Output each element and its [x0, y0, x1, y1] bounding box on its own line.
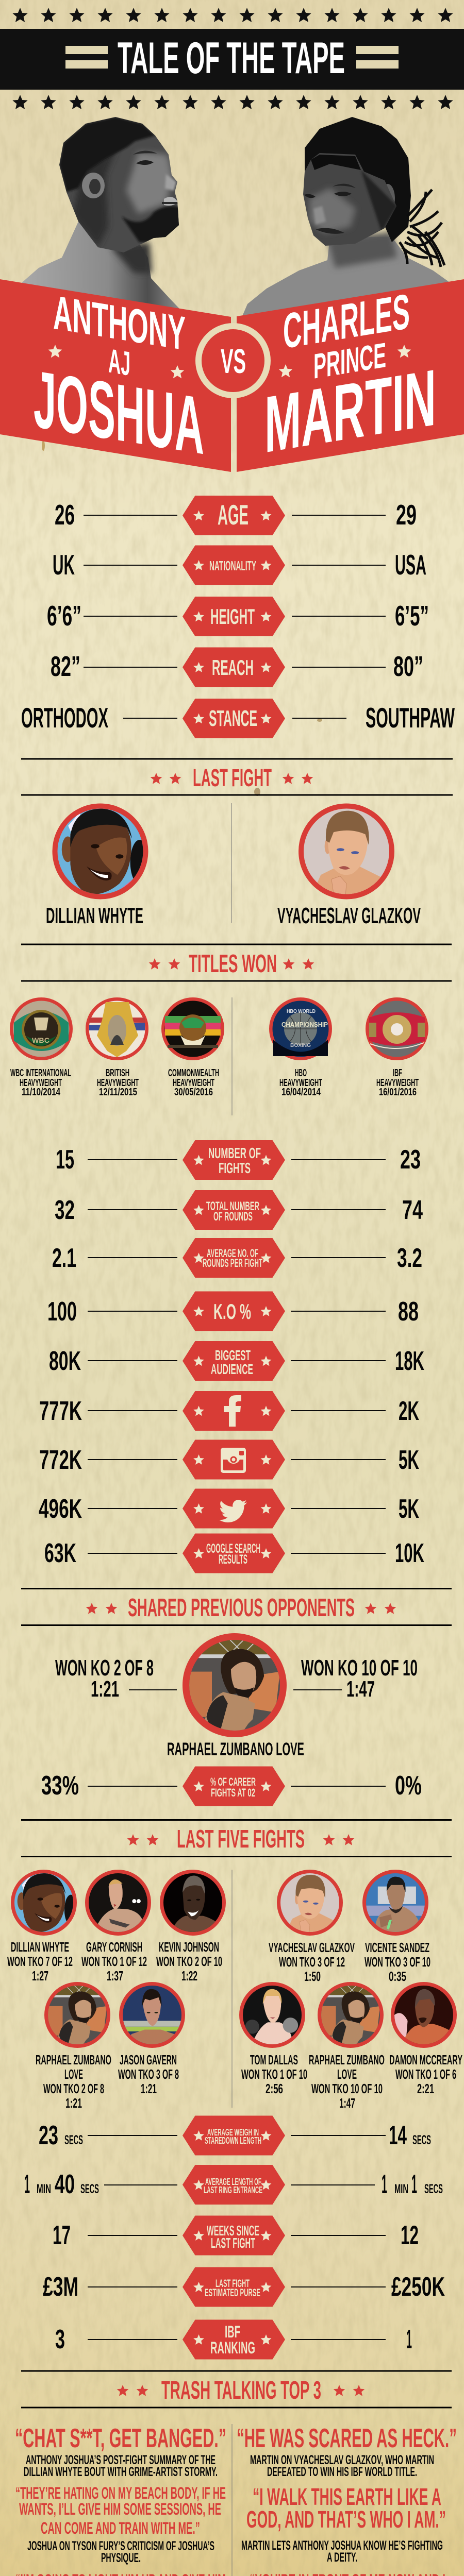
result: Joshua: WON KO 2 OF 8 — [55, 1655, 154, 1681]
row: stance — [21, 699, 455, 738]
fight: Vyacheslav Glazkov: WON TKO 3 OF 12 — [279, 1954, 345, 1970]
fight: Vyacheslav Glazkov: VYACHESLAV GLAZKOV — [269, 1940, 355, 1955]
row: facebook: 2K — [399, 1396, 419, 1426]
row: percent of career fights at O2: FIGHTS AT 02 — [211, 1786, 255, 1799]
row: percent of career fights at O2: 33% — [41, 1771, 79, 1801]
row: nationality: USA — [395, 549, 426, 581]
row: IBF ranking — [55, 2319, 412, 2360]
quote: Martin 2 — [241, 2483, 446, 2565]
labels: Joshua titles: 11/10/2014 — [22, 1087, 61, 1098]
labels: Martin titles: HEAVYWEIGHT — [279, 1077, 322, 1089]
quote: Joshua 2: JOSHUA ON TYSON FURY’S CRITICISM OF JOSHUA’S — [27, 2539, 214, 2553]
VS badge: VS — [221, 342, 246, 381]
fight: Damon McCreary — [389, 1982, 462, 2096]
row: nationality: NATIONALITY — [209, 558, 256, 573]
labels: Martin titles: 16/04/2014 — [281, 1087, 321, 1098]
name: Dillian Whyte: DILLIAN WHYTE — [46, 903, 143, 928]
row: stance: ORTHODOX — [21, 702, 108, 734]
fight: Kevin Johnson: WON TKO 2 OF 10 — [156, 1954, 222, 1969]
row: staredown length — [39, 2115, 431, 2156]
row: ring entrance length: MIN — [394, 2182, 408, 2196]
row: instagram — [39, 1439, 419, 1480]
row: ring entrance length: 40 — [55, 2170, 75, 2199]
row: instagram: 772K — [39, 1445, 82, 1475]
belt: HBO — [269, 997, 332, 1060]
labels: Joshua titles: HEAVYWEIGHT — [97, 1077, 139, 1089]
VS badge — [198, 326, 268, 395]
fight: Jason Gavern: WON TKO 3 OF 8 — [118, 2066, 179, 2082]
row: height — [47, 597, 429, 636]
icon: facebook — [224, 1395, 241, 1427]
belt: Commonwealth — [161, 997, 224, 1060]
row: biggest audience: 18K — [395, 1346, 424, 1376]
row: weeks since last fight — [53, 2215, 419, 2256]
quote: Martin 2: A DEITY. — [327, 2550, 357, 2565]
row: weeks since last fight: 17 — [53, 2221, 71, 2250]
fight: Vyacheslav Glazkov — [269, 1870, 355, 1984]
row: age: AGE — [218, 499, 248, 531]
row: ring entrance length: MIN — [37, 2182, 51, 2196]
row: last fight purse: LAST FIGHT — [216, 2278, 250, 2290]
belt: WBC International — [10, 997, 73, 1060]
row: weeks since last fight: LAST FIGHT — [211, 2235, 255, 2251]
fight: Raphael Zumbano Love (Martin): 1:47 — [339, 2095, 355, 2111]
fight: Raphael Zumbano Love (Joshua): RAPHAEL ZUMBANO — [36, 2052, 111, 2067]
result: Martin: 1:47 — [346, 1676, 375, 1702]
row: ring entrance length: 1 — [382, 2170, 387, 2199]
panel: last fight — [46, 803, 421, 928]
row: percent of career fights at O2 — [41, 1766, 422, 1806]
row: KO percent: 100 — [47, 1297, 77, 1327]
fight: Raphael Zumbano Love (Joshua): WON TKO 2 OF 8 — [43, 2081, 104, 2096]
row: google search results: 63K — [44, 1538, 76, 1568]
fight: Raphael Zumbano Love (Martin): WON TKO 10 OF 10 — [311, 2081, 383, 2096]
quote: Martin 1 — [237, 2424, 457, 2479]
heading: trash talking top 3 — [21, 2370, 452, 2408]
row: percent of career fights at O2: % OF CAREER — [210, 1775, 256, 1788]
text: 1 — [406, 2325, 412, 2354]
fight: Jason Gavern — [118, 1982, 185, 2096]
belt: HBO: CHAMPIONSHIP — [281, 1021, 328, 1028]
panel: last five fights — [7, 1870, 462, 2111]
panel: shared opponent — [55, 1633, 418, 1759]
belt: British — [86, 997, 148, 1060]
quote: Joshua 1: DILLIAN WHYTE BOUT WITH GRIME-ARTIST STORMY. — [24, 2465, 218, 2479]
fight: Dillian Whyte: DILLIAN WHYTE — [11, 1939, 69, 1955]
quote: Joshua 2: PHYSIQUE. — [101, 2551, 141, 2565]
row: reach: REACH — [212, 655, 254, 680]
row: number of fights: NUMBER OF — [208, 1145, 261, 1162]
heading: last five fights: LAST FIVE FIGHTS — [177, 1825, 305, 1853]
row: staredown length: STAREDOWN LENGTH — [205, 2136, 261, 2146]
fight: Raphael Zumbano Love (Joshua): 1:21 — [65, 2095, 82, 2111]
panel: titles won — [10, 997, 428, 1115]
fight: Gary Cornish — [81, 1870, 151, 1984]
fight: Tom Dallas: WON TKO 1 OF 10 — [241, 2066, 307, 2082]
heading: last fight — [21, 758, 453, 795]
title band — [0, 29, 464, 90]
row: KO percent: K.O % — [213, 1299, 251, 1324]
row: ring entrance length: AVERAGE LENGTH OF — [205, 2177, 261, 2187]
row: KO percent — [47, 1291, 419, 1331]
heading: trash talking top 3: TRASH TALKING TOP 3 — [161, 2377, 321, 2404]
row: reach: 80” — [393, 650, 423, 682]
row: biggest audience: AUDIENCE — [211, 1361, 253, 1377]
heading: shared previous opponents — [21, 1588, 452, 1626]
fight: Jason Gavern: JASON GAVERN — [120, 2052, 177, 2067]
row: average rounds: 3.2 — [397, 1243, 422, 1273]
name: Joshua: JOSHUA — [34, 354, 204, 471]
fight: Tom Dallas: 2:56 — [266, 2081, 283, 2096]
fight: Vicente Sandez: 0:35 — [389, 1969, 406, 1984]
fight: Raphael Zumbano Love (Martin) — [309, 1982, 385, 2111]
row: twitter — [39, 1489, 419, 1528]
row: last fight purse: ESTIMATED PURSE — [205, 2287, 260, 2299]
row: total rounds: TOTAL NUMBER — [206, 1199, 259, 1213]
labels: Joshua titles: 12/11/2015 — [99, 1087, 137, 1098]
row: height: HEIGHT — [210, 604, 255, 629]
row: total rounds — [55, 1190, 423, 1230]
fight: Tom Dallas — [239, 1982, 307, 2096]
labels: Joshua titles — [10, 1067, 219, 1098]
row: instagram: 5K — [399, 1445, 419, 1475]
row: number of fights: 15 — [56, 1145, 74, 1175]
quote: Joshua 2: WANTS, I’LL GIVE HIM SOME SESSIONS, HE — [19, 2500, 221, 2518]
row: average rounds: 2.1 — [52, 1243, 76, 1273]
row: biggest audience: 80K — [49, 1346, 81, 1376]
row: twitter: 496K — [39, 1494, 82, 1524]
row: age: 26 — [55, 499, 75, 531]
quote: Joshua 1: ANTHONY JOSHUA’S POST-FIGHT SUMMARY OF THE — [26, 2453, 216, 2467]
row: staredown length: SECS — [64, 2133, 83, 2147]
belt: HBO: BOXING — [290, 1043, 311, 1048]
portrait: Raphael Zumbano Love — [183, 1633, 287, 1737]
row: google search results: GOOGLE SEARCH — [206, 1541, 260, 1556]
row: IBF ranking: RANKING — [210, 2338, 255, 2357]
row: weeks since last fight: WEEKS SINCE — [207, 2223, 259, 2239]
row: facebook — [39, 1391, 419, 1431]
row: reach: 82” — [51, 650, 80, 682]
portrait: Vyacheslav Glazkov — [299, 804, 394, 900]
row: weeks since last fight: 12 — [401, 2221, 419, 2250]
stars row: below title — [12, 95, 453, 109]
row: KO percent: 88 — [398, 1297, 419, 1327]
row: staredown length: 23 — [39, 2121, 58, 2150]
photo: Anthony Joshua — [22, 117, 179, 308]
fight: Raphael Zumbano Love (Martin): LOVE — [337, 2066, 357, 2082]
row: age: 29 — [396, 499, 417, 531]
row: total rounds: 74 — [402, 1195, 423, 1225]
quote: Joshua 1 — [15, 2424, 226, 2479]
row: number of fights: 23 — [400, 1145, 421, 1175]
fight: Dillian Whyte: WON TKO 7 OF 12 — [7, 1954, 73, 1969]
row: last fight purse — [43, 2267, 445, 2307]
fight: Jason Gavern: 1:21 — [141, 2081, 157, 2096]
labels: Joshua titles: HEAVYWEIGHT — [20, 1077, 62, 1089]
quote: Joshua 1: “CHAT S**T, GET BANGED.” — [15, 2424, 226, 2453]
row: height: 6’6” — [47, 600, 81, 632]
heading: last fight: LAST FIGHT — [193, 765, 272, 792]
row: ring entrance length: SECS — [80, 2182, 99, 2196]
fight: Kevin Johnson: KEVIN JOHNSON — [159, 1939, 219, 1955]
row: ring entrance length: LAST RING ENTRANCE — [204, 2185, 262, 2195]
labels: Joshua titles: COMMONWEALTH — [168, 1067, 219, 1079]
fight: Kevin Johnson: 1:22 — [181, 1968, 197, 1984]
labels: Martin titles: 16/01/2016 — [379, 1087, 417, 1098]
row: percent of career fights at O2: 0% — [395, 1771, 422, 1801]
row: staredown length: AVERAGE WEIGH IN — [207, 2127, 259, 2138]
fight: Raphael Zumbano Love (Martin): RAPHAEL ZUMBANO — [309, 2052, 385, 2067]
row: nationality: UK — [53, 549, 75, 581]
labels: Joshua titles: HEAVYWEIGHT — [173, 1077, 214, 1089]
fight: Gary Cornish: GARY CORNISH — [86, 1939, 142, 1955]
row: facebook: 777K — [39, 1396, 82, 1426]
banner stars right — [279, 345, 411, 377]
row: google search results — [44, 1533, 424, 1573]
row: height: 6’5” — [395, 600, 429, 632]
quote: Joshua 2: CAN COME AND TRAIN WITH ME.” — [41, 2519, 200, 2537]
row: staredown length: SECS — [412, 2133, 431, 2147]
fight: Gary Cornish: WON TKO 1 OF 12 — [81, 1954, 147, 1969]
row: ring entrance length — [24, 2165, 443, 2205]
row: ring entrance length: SECS — [424, 2182, 443, 2196]
fight: Tom Dallas: TOM DALLAS — [250, 2052, 298, 2067]
name: Raphael Zumbano Love: RAPHAEL ZUMBANO LOVE — [167, 1739, 304, 1759]
row: IBF ranking: IBF — [225, 2323, 240, 2341]
fight: Vyacheslav Glazkov: 1:50 — [304, 1969, 321, 1984]
row: number of fights: FIGHTS — [219, 1160, 251, 1177]
panel: trash talk — [15, 2424, 457, 2576]
row: total rounds: 32 — [55, 1195, 75, 1225]
portrait: Dillian Whyte — [53, 804, 149, 900]
photo: Charles Martin — [240, 117, 451, 322]
icon: instagram — [221, 1448, 246, 1473]
labels: Martin titles: IBF — [393, 1067, 402, 1079]
labels: Joshua titles: BRITISH — [106, 1067, 129, 1079]
fight: Damon McCreary: 2:21 — [417, 2081, 434, 2096]
row: biggest audience — [49, 1341, 424, 1381]
labels: Joshua titles: 30/05/2016 — [174, 1087, 213, 1098]
row: staredown length: 14 — [389, 2121, 407, 2150]
row: average rounds — [52, 1238, 422, 1278]
banner: Joshua — [0, 279, 231, 472]
name: Anthony: ANTHONY — [53, 285, 186, 361]
heading: titles won: TITLES WON — [189, 950, 277, 978]
row: average rounds: ROUNDS PER FIGHT — [203, 1257, 262, 1269]
icon: twitter — [219, 1500, 247, 1522]
row: age — [55, 496, 417, 535]
result: Martin — [301, 1655, 418, 1702]
labels: Martin titles: HBO — [295, 1067, 307, 1079]
fight: Dillian Whyte: 1:27 — [32, 1968, 48, 1984]
fight: Raphael Zumbano Love (Joshua): LOVE — [64, 2066, 83, 2082]
fight: Dillian Whyte — [7, 1870, 77, 1984]
row: last fight purse: £3M — [43, 2272, 78, 2302]
labels: Martin titles: HEAVYWEIGHT — [376, 1077, 419, 1089]
belt: HBO: HBO WORLD — [287, 1009, 316, 1014]
row: number of fights — [56, 1140, 421, 1180]
row: stance: STANCE — [209, 706, 257, 731]
stars row: top — [12, 8, 453, 22]
banner: Martin — [237, 279, 464, 472]
name: AJ: AJ — [108, 342, 130, 383]
fight: Kevin Johnson — [156, 1870, 226, 1984]
row: google search results: 10K — [395, 1538, 424, 1568]
fight: Raphael Zumbano Love (Joshua) — [36, 1982, 111, 2111]
row: ring entrance length: 1 — [411, 2170, 417, 2199]
name: Prince: PRINCE — [313, 335, 386, 386]
row: reach — [51, 647, 423, 687]
result: Joshua — [55, 1655, 154, 1702]
result: Joshua: 1:21 — [91, 1676, 119, 1702]
row: ring entrance length: 1 — [24, 2170, 30, 2199]
fight: Gary Cornish: 1:37 — [107, 1968, 123, 1984]
row: average rounds: AVERAGE NO. OF — [207, 1247, 258, 1260]
labels: Martin titles — [279, 1067, 419, 1098]
fight: Vicente Sandez — [362, 1870, 430, 1984]
banner stars left — [48, 345, 184, 378]
heading: titles won — [21, 944, 452, 982]
row: biggest audience: BIGGEST — [215, 1347, 251, 1363]
row: twitter: 5K — [399, 1494, 419, 1524]
quote: Joshua 2: “THEY’RE HATING ON MY BEACH BODY, IF HE — [15, 2484, 226, 2502]
row: total rounds: OF ROUNDS — [213, 1210, 253, 1224]
quote: Joshua 2 — [15, 2484, 226, 2565]
heading: last five fights — [21, 1819, 452, 1857]
row: IBF ranking: 3 — [55, 2325, 65, 2354]
belt: IBF — [366, 997, 428, 1060]
belt: WBC International: WBC — [32, 1036, 49, 1044]
labels: Joshua titles: WBC INTERNATIONAL — [10, 1067, 71, 1079]
row: google search results: RESULTS — [219, 1552, 247, 1567]
row: nationality — [53, 545, 426, 585]
